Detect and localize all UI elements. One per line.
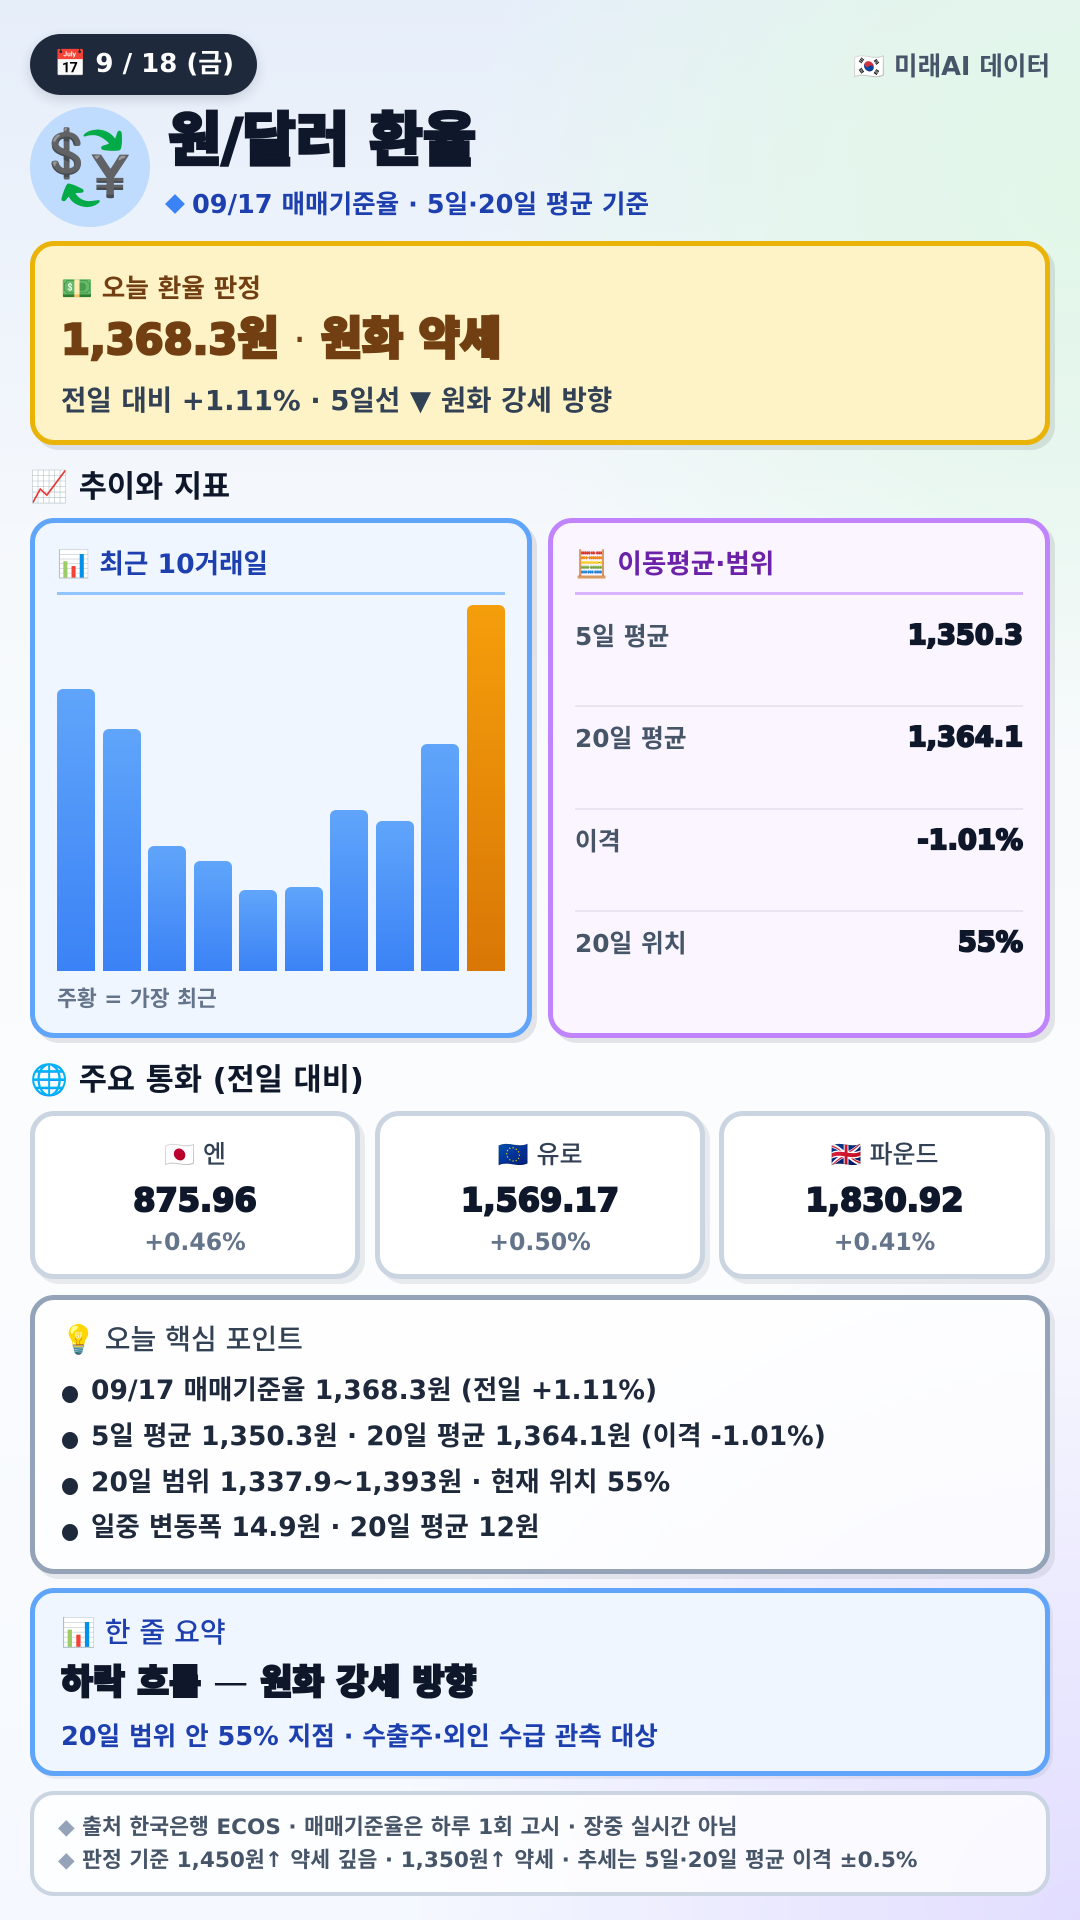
row: 20-day position: 20일 위치 — [575, 929, 687, 958]
row: gap: 이격 — [575, 827, 621, 856]
point 2: 5일 평균 1,350.3원 · 20일 평균 1,364.1원 (이격 -1.01%) — [91, 1421, 826, 1452]
icon: diamond — [165, 194, 185, 214]
panel heading: 📊 최근 10거래일 — [57, 549, 268, 580]
title: 원/달러 환율 — [168, 106, 476, 174]
summary detail: 20일 범위 안 55% 지점 · 수출주·외인 수급 관측 대상 — [61, 1722, 658, 1752]
row: gap: -1.01% — [917, 825, 1023, 856]
panel: footnote — [30, 1791, 1050, 1896]
panel: verdict — [30, 241, 1050, 445]
date pill — [30, 34, 257, 95]
subtitle: 09/17 매매기준율 · 5일·20일 평균 기준 — [192, 190, 649, 220]
panel: one-line summary — [30, 1588, 1050, 1776]
summary heading: 📊 한 줄 요약 — [61, 1616, 226, 1649]
bar chart — [57, 605, 505, 971]
verdict detail: 전일 대비 +1.11% · 5일선 ▼ 원화 강세 방향 — [61, 384, 612, 417]
bullet 4 — [62, 1524, 78, 1541]
icon: currency exchange: 💱 — [45, 125, 135, 209]
point 4: 일중 변동폭 14.9원 · 20일 평균 12원 — [91, 1512, 539, 1543]
verdict headline: 1,368.3원 · 원화 약세 — [61, 312, 501, 365]
point 1: 09/17 매매기준율 1,368.3원 (전일 +1.11%) — [91, 1375, 657, 1406]
card: yen: 🇯🇵 엔 — [164, 1140, 226, 1169]
chart note: 주황 = 가장 최근 — [57, 987, 217, 1012]
key points heading: 💡 오늘 핵심 포인트 — [61, 1323, 303, 1356]
card: euro: 🇪🇺 유로 — [497, 1140, 583, 1169]
bullet 1 — [62, 1386, 78, 1403]
criteria note: ◆ 판정 기준 1,450원↑ 약세 깊음 · 1,350원↑ 약세 · 추세는 5일·20일 평균 이격 ±0.5% — [58, 1848, 918, 1873]
row: 5-day average — [575, 620, 1023, 651]
section heading: trend: 📈 추이와 지표 — [30, 470, 230, 505]
panel: moving averages — [548, 518, 1050, 1038]
source note: ◆ 출처 한국은행 ECOS · 매매기준율은 하루 1회 고시 · 장중 실시간 아님 — [58, 1815, 738, 1840]
card: yen: +0.46% — [144, 1228, 246, 1256]
card: pound: 🇬🇧 파운드 — [830, 1140, 939, 1169]
card: pound: 1,830.92 — [806, 1181, 963, 1219]
icon: currency exchange — [30, 107, 150, 227]
row: gap — [575, 825, 1024, 856]
panel heading: 🧮 이동평균·범위 — [575, 549, 774, 580]
card: yen — [30, 1111, 360, 1279]
card: pound — [719, 1111, 1050, 1279]
card: euro — [375, 1111, 705, 1279]
card: yen: 875.96 — [133, 1181, 257, 1219]
card: pound: +0.41% — [834, 1228, 935, 1256]
panel: recent 10 days — [30, 518, 532, 1038]
row: 20-day average: 20일 평균 — [575, 724, 687, 753]
card: euro: 1,569.17 — [461, 1181, 619, 1219]
section heading: currencies: 🌐 주요 통화 (전일 대비) — [30, 1063, 364, 1098]
row: 20-day position: 55% — [958, 927, 1023, 958]
panel: key points — [30, 1295, 1050, 1574]
summary headline: 하락 흐름 — 원화 강세 방향 — [61, 1663, 477, 1703]
row: 20-day position — [575, 927, 1024, 958]
verdict label: 💵 오늘 환율 판정 — [61, 274, 261, 304]
row: 5-day average: 1,350.3 — [908, 620, 1023, 651]
brand label: 🇰🇷 미래AI 데이터 — [853, 52, 1050, 82]
row: 5-day average: 5일 평균 — [575, 622, 669, 651]
date pill: 📅 9 / 18 (금) — [54, 49, 234, 79]
point 3: 20일 범위 1,337.9~1,393원 · 현재 위치 55% — [91, 1467, 670, 1498]
bullet 3 — [62, 1478, 78, 1495]
row: 20-day average — [575, 722, 1023, 753]
row: 20-day average: 1,364.1 — [908, 722, 1023, 753]
card: euro: +0.50% — [489, 1228, 591, 1256]
bullet 2 — [62, 1432, 78, 1449]
